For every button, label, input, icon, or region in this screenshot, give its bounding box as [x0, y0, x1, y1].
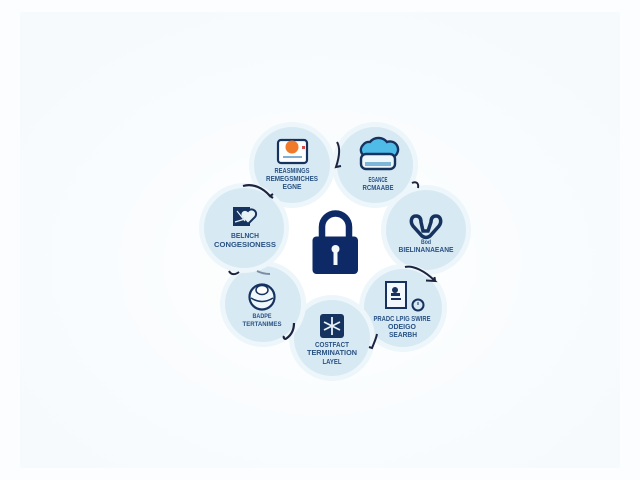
arrow: right to bottom right	[405, 267, 435, 281]
panel: top left step: REMEGSMICHES	[266, 176, 318, 183]
label: bottom step: COSTFACT	[315, 340, 349, 349]
panel: bottom right step: SEARBH	[389, 332, 417, 339]
label: right step: Bod	[421, 239, 431, 246]
icon: cloud over stack	[361, 138, 398, 169]
arrow: top left to top right	[336, 142, 341, 167]
panel: bottom right step	[359, 264, 447, 352]
label: bottom left step: BADPE	[252, 313, 272, 320]
arrow: left to top left	[243, 185, 273, 198]
panel: top left step: EGNE	[282, 184, 302, 191]
panel: bottom left step	[220, 261, 306, 347]
panel: top right step: RCMAABE	[362, 185, 394, 192]
arrow: bottom left to left	[229, 271, 239, 274]
icon: round jar	[250, 284, 274, 310]
panel: top left step	[249, 122, 335, 208]
panel: bottom right step: ODEIGO	[388, 324, 417, 331]
label: top right step: EGANCE	[368, 177, 388, 184]
icon: starburst badge	[320, 314, 344, 338]
icon: shield loop	[411, 216, 441, 238]
icon: card with orange seal	[278, 140, 307, 163]
icon: document and clock	[386, 282, 424, 310]
panel: top right step	[332, 122, 418, 208]
arrow fragment near bottom left	[257, 271, 270, 274]
icon: central padlock	[312, 214, 358, 274]
panel: bottom left step: TERTANIMES	[242, 321, 282, 328]
panel: bottom step: LAYEL	[322, 357, 342, 366]
panel: right step	[381, 185, 471, 275]
label: top left step: REASMINGS	[274, 168, 310, 175]
arrow: bottom right to bottom	[369, 334, 377, 348]
panel: left step	[199, 183, 289, 273]
panel: left step: CONGESIONESS	[214, 240, 276, 249]
label: left step: BELNCH	[231, 233, 259, 240]
panel: bottom step	[289, 295, 375, 381]
label: bottom right step: PRADC LPIG SWIRE	[374, 316, 431, 323]
icon: flag and heart	[233, 207, 256, 226]
panel: bottom step: TERMINATION	[307, 348, 357, 357]
arrow: top right to right	[412, 182, 418, 188]
panel: right step: BIELINANAEANE	[398, 247, 454, 254]
arrow: bottom to bottom left	[284, 323, 294, 339]
